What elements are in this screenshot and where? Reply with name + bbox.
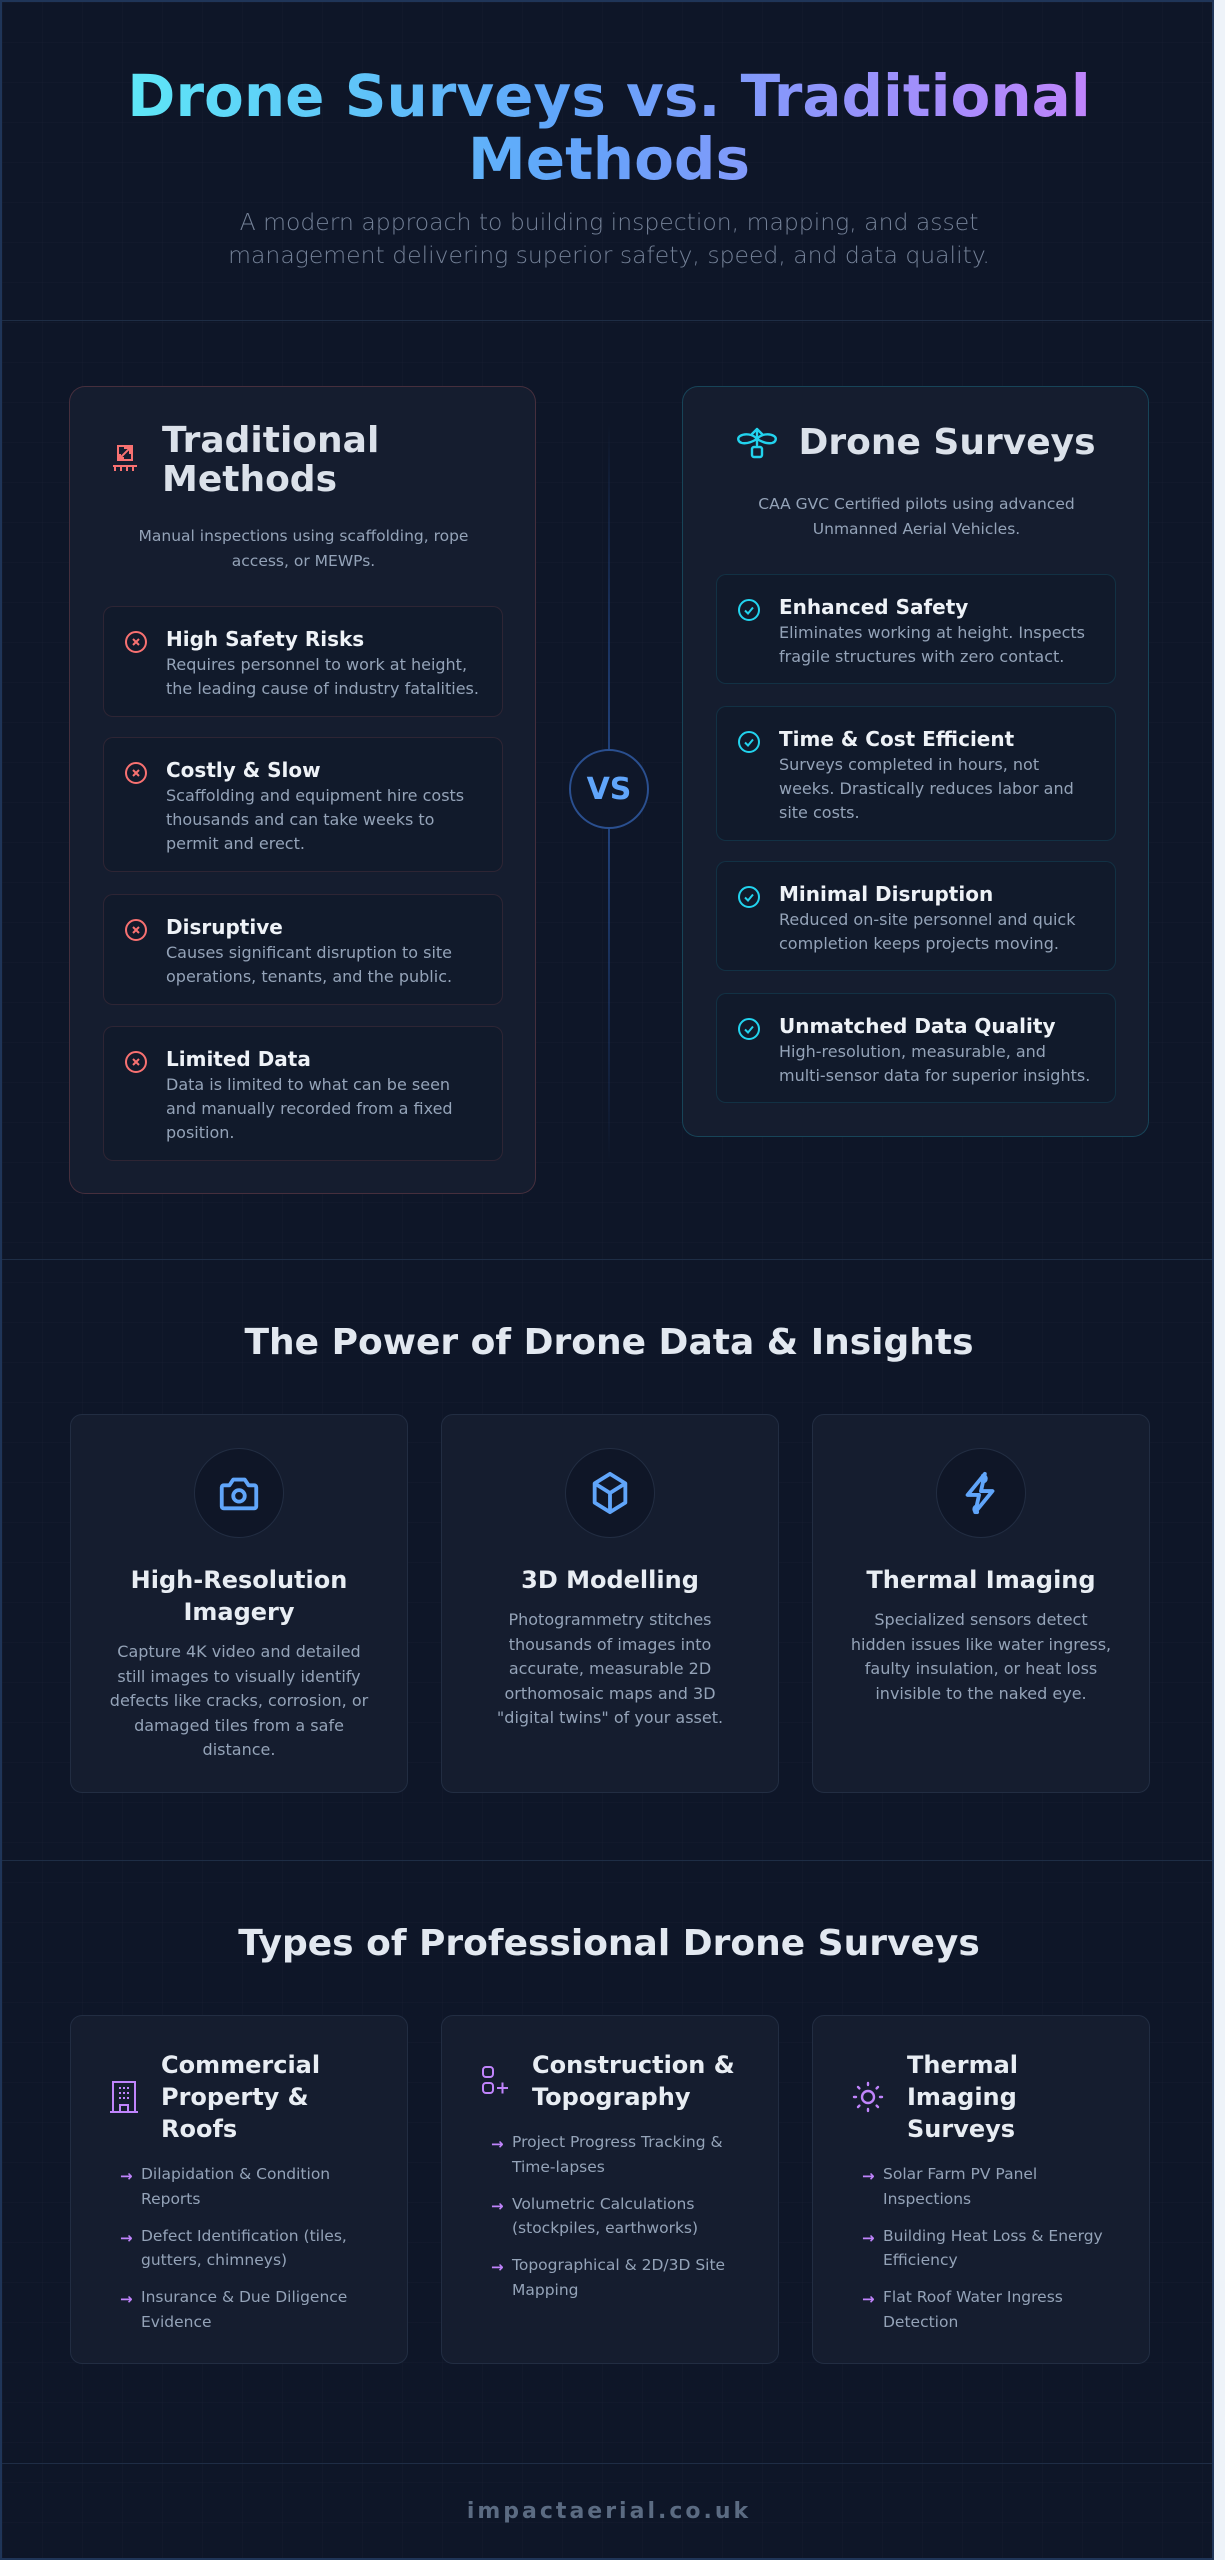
item: enhanced safety [716, 574, 1116, 684]
item: costly & slow: Costly & Slow [166, 758, 321, 782]
item: enhanced safety: Enhanced Safety [779, 595, 968, 619]
item: limited data: and manually recorded from a fixed [166, 1099, 453, 1118]
card: commercial property: Dilapidation & Condition Reports [141, 2165, 330, 2208]
item: minimal disruption [716, 861, 1116, 971]
description: Manual inspections using scaffolding, rope access, or MEWPs. [139, 527, 468, 570]
footer: impactaerial.co.uk [467, 2499, 751, 2524]
card: high-resolution imagery: High-Resolution [131, 1566, 347, 1594]
card: thermal surveys: Thermal [907, 2051, 1018, 2079]
card: commercial property [70, 2015, 408, 2364]
item: limited data: Limited Data [166, 1047, 311, 1071]
description: CAA GVC Certified pilots using advanced Unmanned Aerial Vehicles. [758, 495, 1075, 538]
item: disruptive: Disruptive [166, 915, 283, 939]
icon: bolt [936, 1448, 1026, 1538]
card: commercial property: Commercial [161, 2051, 320, 2079]
card: thermal surveys: Building Heat Loss & Energy Efficiency [883, 2226, 1103, 2269]
title: Methods [468, 125, 750, 193]
card: commercial property: Roofs [161, 2115, 237, 2143]
item: costly & slow: Scaffolding and equipment hire costs thousands and can take weeks to [166, 786, 464, 829]
item: enhanced safety: Eliminates working at height. Inspects fragile structures with zero contact. [779, 623, 1085, 666]
icon: shapes [482, 2066, 508, 2094]
card: construction: Topographical & 2D/3D Site Mapping [512, 2256, 725, 2298]
item: minimal disruption: Reduced on-site personnel and quick completion keeps projects moving. [779, 910, 1075, 953]
item: time & cost: site costs. [779, 803, 860, 822]
card: thermal imaging [812, 1414, 1150, 1793]
subtitle: A modern approach to building inspection, mapping, and asset management delivering superior safety, speed, and data quality. [228, 208, 990, 269]
panel heading: drone: Drone Surveys [798, 422, 1096, 463]
card: thermal surveys: Imaging [907, 2083, 1017, 2111]
icon: building [110, 2081, 138, 2113]
icon: drone [737, 428, 777, 458]
card: construction: Project Progress Tracking & Time-lapses [512, 2133, 723, 2176]
card: thermal surveys: Surveys [907, 2115, 1015, 2143]
panel: traditional methods [69, 386, 536, 1194]
item: costly & slow: permit and erect. [166, 834, 305, 853]
heading: power of drone data: The Power of Drone Data & Insights [244, 1322, 974, 1363]
item: minimal disruption: Minimal Disruption [779, 882, 993, 906]
card: high-resolution imagery [70, 1414, 408, 1793]
card: thermal surveys [812, 2015, 1150, 2364]
title: Drone Surveys vs. Traditional [127, 62, 1091, 130]
card: thermal imaging: Thermal Imaging [866, 1566, 1096, 1594]
panel: drone surveys [682, 386, 1149, 1137]
vs badge [569, 749, 649, 829]
item: disruptive: Causes significant disruption to site operations, tenants, and the public. [166, 943, 452, 986]
item: time & cost: Time & Cost Efficient [779, 727, 1014, 751]
card: high-resolution imagery: Imagery [183, 1598, 295, 1626]
heading: types of surveys: Types of Professional Drone Surveys [238, 1923, 980, 1964]
vs line [608, 422, 610, 1162]
item: time & cost: weeks. Drastically reduces labor and [779, 779, 1074, 798]
panel heading: traditional: Traditional Methods [162, 420, 379, 500]
item: limited data [103, 1026, 503, 1161]
item: time & cost [716, 706, 1116, 841]
icon: sun [852, 2082, 884, 2112]
item: data quality: High-resolution, measurable, and [779, 1042, 1046, 1061]
title [127, 62, 1091, 193]
card: commercial property: Defect Identification (tiles, gutters, chimneys) [141, 2226, 347, 2269]
item: high safety risks: High Safety Risks [166, 627, 364, 651]
card: construction: Topography [532, 2083, 690, 2111]
item: data quality: multi-sensor data for superior insights. [779, 1066, 1090, 1085]
item: limited data: Data is limited to what can be seen [166, 1075, 450, 1094]
icon: cube [565, 1448, 655, 1538]
card: 3d modelling: 3D Modelling [521, 1566, 699, 1594]
item: limited data: position. [166, 1123, 234, 1142]
card: 3d modelling [441, 1414, 779, 1793]
card: thermal surveys: Solar Farm PV Panel Inspections [883, 2165, 1037, 2208]
card: high-resolution imagery: Capture 4K video and detailed still images to visually identify defects like cracks, corrosion, or damaged tiles from a safe distance. [110, 1642, 368, 1759]
item: high safety risks [103, 606, 503, 717]
icon: camera [194, 1448, 284, 1538]
item: high safety risks: Requires personnel to work at height, the leading cause of industry fatalities. [166, 655, 479, 698]
item: data quality: Unmatched Data Quality [779, 1014, 1055, 1038]
item: disruptive [103, 894, 503, 1005]
card: construction [441, 2015, 779, 2364]
card: construction: Volumetric Calculations (stockpiles, earthworks) [512, 2194, 698, 2237]
card: thermal surveys: Flat Roof Water Ingress Detection [883, 2288, 1063, 2330]
card: construction: Construction & [532, 2051, 735, 2079]
card: thermal imaging: Specialized sensors detect hidden issues like water ingress, faulty insulation, or heat loss invisible to the naked eye. [851, 1610, 1111, 1702]
vs badge: VS [587, 772, 631, 806]
card: 3d modelling: Photogrammetry stitches thousands of images into accurate, measurable 2D orthomosaic maps and 3D "digital twins" of your asset. [497, 1610, 723, 1727]
icon: scaffold [113, 445, 137, 471]
card: commercial property: Insurance & Due Diligence Evidence [141, 2288, 347, 2330]
card: commercial property: Property & [161, 2083, 309, 2111]
item: costly & slow [103, 737, 503, 872]
item: data quality [716, 993, 1116, 1103]
item: time & cost: Surveys completed in hours, not [779, 755, 1039, 774]
